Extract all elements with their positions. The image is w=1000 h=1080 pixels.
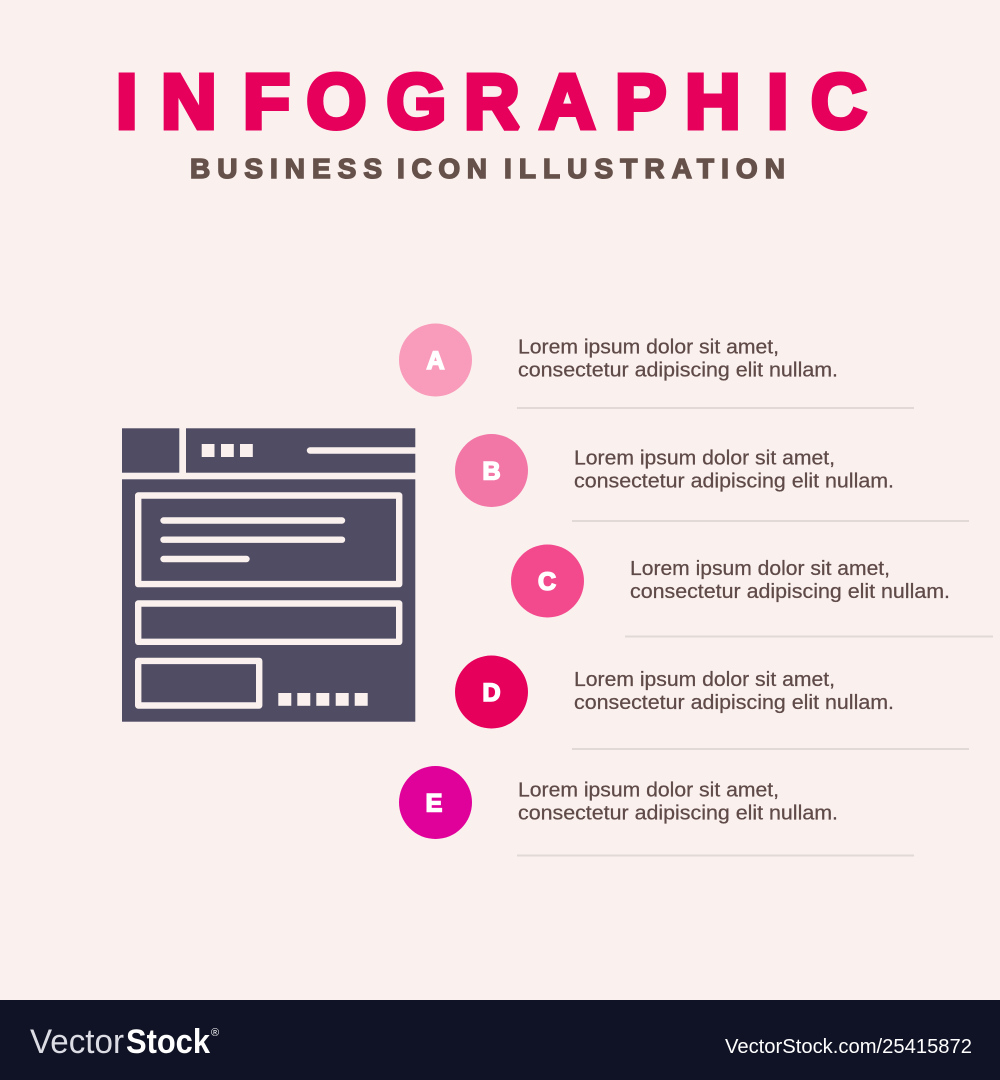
- title: INFOGRAPHIC: [116, 59, 867, 145]
- item C: consectetur adipiscing elit nullam.: [630, 581, 950, 603]
- subtitle: BUSINESS: [190, 153, 382, 184]
- item A: consectetur adipiscing elit nullam.: [518, 360, 838, 382]
- item C: Lorem ipsum dolor sit amet,: [630, 558, 890, 580]
- item A: Lorem ipsum dolor sit amet,: [518, 336, 779, 358]
- subtitle: ICON: [397, 153, 487, 184]
- item E: Lorem ipsum dolor sit amet,: [518, 780, 779, 802]
- item D: [455, 656, 969, 750]
- item B: Lorem ipsum dolor sit amet,: [574, 448, 835, 470]
- footer bar: VectorStock.com/25415872: [725, 1036, 972, 1058]
- item D: D: [482, 679, 501, 707]
- footer bar: Stock: [126, 1023, 210, 1061]
- item D: Lorem ipsum dolor sit amet,: [574, 669, 835, 691]
- item B: B: [482, 458, 501, 486]
- subtitle: ILLUSTRATION: [504, 153, 785, 184]
- item A: [399, 324, 914, 409]
- icon: browser window layout: [122, 428, 415, 722]
- footer bar: [0, 1000, 1000, 1080]
- item E: consectetur adipiscing elit nullam.: [518, 802, 838, 824]
- item E: E: [426, 790, 442, 818]
- item C: [511, 544, 993, 638]
- item E: [399, 766, 914, 856]
- footer bar: Vector: [30, 1023, 124, 1061]
- item B: [455, 434, 969, 522]
- item A: A: [426, 347, 445, 375]
- item B: consectetur adipiscing elit nullam.: [574, 470, 894, 492]
- subtitle: [190, 153, 785, 184]
- footer bar: ®: [211, 1027, 219, 1039]
- item D: consectetur adipiscing elit nullam.: [574, 692, 894, 714]
- item C: C: [538, 568, 556, 596]
